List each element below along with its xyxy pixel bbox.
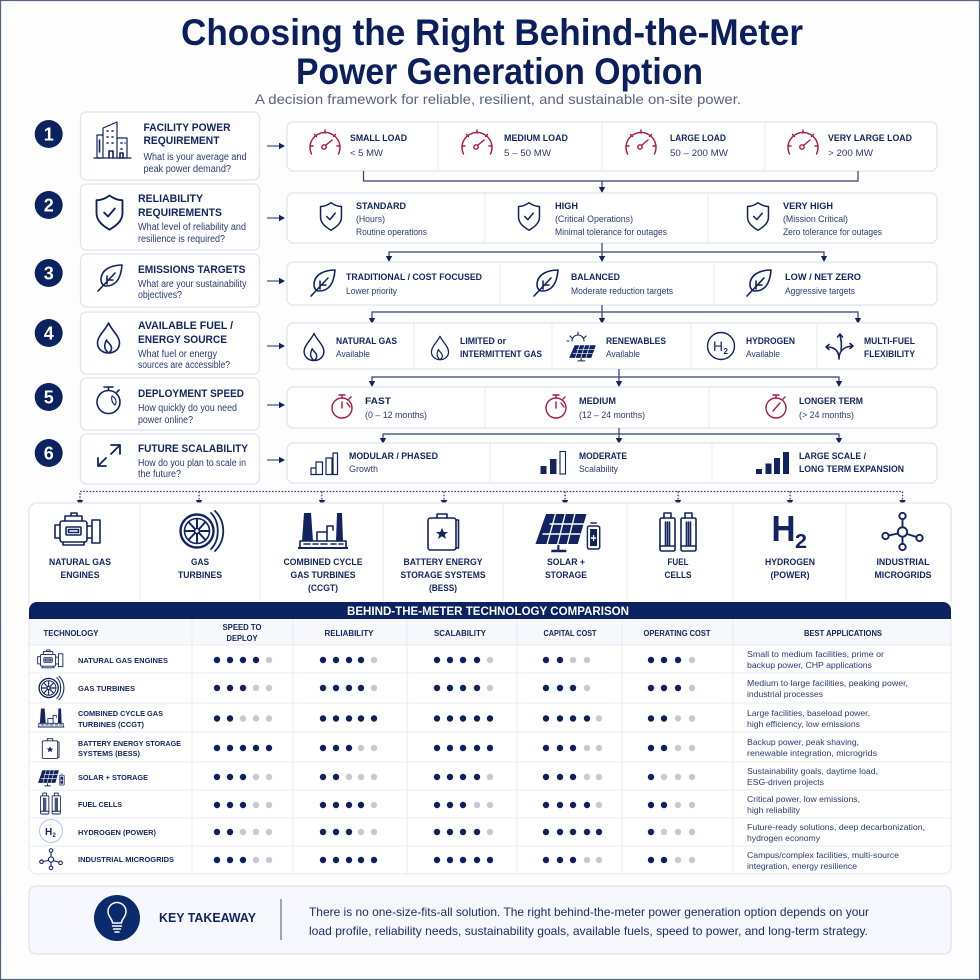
speed options panel: FAST	[365, 396, 391, 407]
row: battery storage: Backup power, peak shaving,	[747, 737, 859, 747]
scalability options panel: MODULAR / PHASED	[349, 451, 438, 462]
icon: hydrogen circle: H	[713, 338, 723, 354]
technology: combined cycle: (CCGT)	[308, 583, 338, 594]
load options panel: > 200 MW	[828, 148, 874, 158]
icon: hydrogen circle: 2	[724, 347, 728, 356]
fuel options panel	[287, 323, 937, 369]
technology: hydrogen: (POWER)	[770, 570, 810, 581]
arrow	[267, 457, 285, 463]
row: gas turbines: Medium to large facilities, peaking power,	[747, 678, 908, 688]
row: natural gas engines: NATURAL GAS ENGINES	[78, 656, 168, 665]
question card 2: RELIABILITY	[138, 193, 203, 205]
arrow	[267, 402, 285, 408]
takeaway text: load profile, reliability needs, sustainability goals, available fuels, speed to power, and long-term strategy.	[309, 924, 868, 938]
technology: battery storage	[400, 514, 486, 594]
step number 4: 4	[44, 324, 54, 344]
technology: battery storage: STORAGE SYSTEMS	[400, 570, 486, 581]
row: fuel cells: high reliability	[747, 805, 801, 815]
row: hydrogen: HYDROGEN (POWER)	[78, 828, 156, 837]
subtitle: A decision framework for reliable, resilient, and sustainable on-site power.	[255, 91, 741, 107]
icon: leaf balanced	[534, 270, 558, 296]
icon: gauge medium	[462, 130, 492, 154]
icon: stopwatch with leaf	[97, 387, 120, 414]
technology: combined cycle: GAS TURBINES	[290, 570, 356, 581]
reliability options panel: (Mission Critical)	[783, 214, 848, 224]
technology: microgrids: MICROGRIDS	[874, 570, 932, 581]
step 2: reliability requirements	[35, 184, 937, 250]
row: solar and storage	[38, 766, 878, 787]
scalability options panel: LARGE SCALE /	[799, 451, 866, 462]
scalability options panel: Scalability	[579, 464, 618, 474]
question card 5: DEPLOYMENT SPEED	[138, 388, 244, 400]
table header row: TECHNOLOGY	[44, 629, 99, 638]
row: industrial microgrids	[40, 849, 899, 871]
step 6: future scalability	[35, 434, 937, 484]
title	[181, 12, 803, 92]
icon: gauge very large	[788, 130, 818, 154]
icon: large bars	[756, 452, 789, 474]
question card 1: FACILITY POWER	[144, 122, 230, 134]
icon: stopwatch fast	[332, 395, 352, 418]
icon: leaf net zero	[747, 270, 771, 296]
icon: shield very high	[748, 203, 768, 230]
question card 2: resilience is required?	[138, 234, 226, 245]
fuel options panel: RENEWABLES	[606, 336, 667, 347]
reliability options panel: Routine operations	[356, 227, 427, 237]
row: battery storage: SYSTEMS (BESS)	[78, 749, 140, 758]
technology: hydrogen: H	[772, 508, 796, 549]
question card 2	[80, 184, 260, 250]
reliability options panel: STANDARD	[356, 201, 406, 212]
load options panel: SMALL LOAD	[350, 133, 407, 144]
technology: combined cycle: COMBINED CYCLE	[284, 557, 363, 568]
panel: technologies	[29, 503, 951, 602]
panel: key takeaway	[29, 886, 951, 954]
scalability options panel	[287, 443, 937, 483]
icon: shield standard	[321, 203, 341, 230]
question card 4	[80, 312, 260, 374]
speed options panel: (12 – 24 months)	[579, 410, 645, 420]
row: fuel cells	[41, 793, 860, 815]
table header row: CAPITAL COST	[544, 629, 597, 638]
connector 1 to 2	[364, 171, 858, 193]
question card 1: peak power demand?	[144, 164, 232, 175]
technology: battery storage: (BESS)	[429, 583, 457, 594]
connector 3 to 4	[369, 305, 861, 324]
step number 2	[35, 191, 63, 219]
fuel options panel: HYDROGEN	[746, 336, 795, 347]
reliability options panel: Zero tolerance for outages	[783, 227, 882, 237]
technology: natural gas engines: NATURAL GAS	[49, 557, 112, 568]
table header row: OPERATING COST	[644, 629, 711, 638]
emissions options panel: Aggressive targets	[785, 286, 855, 296]
speed options panel	[287, 387, 937, 428]
question card 5	[80, 378, 260, 430]
question card 4: ENERGY SOURCE	[138, 334, 227, 346]
technology: battery storage: BATTERY ENERGY	[404, 557, 483, 568]
row: gas turbines: industrial processes	[747, 689, 823, 699]
speed options panel: (> 24 months)	[799, 410, 854, 420]
reliability options panel: (Hours)	[356, 214, 385, 224]
arrow	[267, 343, 285, 349]
row: combined cycle: COMBINED CYCLE GAS	[78, 709, 163, 718]
row: gas turbines: GAS TURBINES	[78, 684, 135, 693]
title: Power Generation Option	[296, 51, 703, 92]
question card 3: What are your sustainability	[138, 279, 247, 290]
question card 4: AVAILABLE FUEL /	[138, 320, 233, 332]
step number 6: 6	[44, 444, 54, 464]
fuel options panel: Available	[336, 349, 370, 359]
icon: hydrogen circle	[708, 332, 734, 360]
icon: stopwatch medium	[546, 395, 566, 418]
load options panel: 5 – 50 MW	[504, 148, 552, 158]
question card 1: REQUIREMENT	[144, 135, 220, 147]
table header row	[30, 619, 950, 645]
load options panel	[287, 122, 937, 171]
technology: solar and storage: STORAGE	[545, 570, 588, 581]
arrow	[267, 215, 285, 221]
scalability options panel: MODERATE	[579, 451, 628, 462]
question card 2: What level of reliability and	[138, 222, 246, 233]
question card 6: the future?	[138, 469, 182, 480]
row: battery storage: renewable integration, microgrids	[747, 748, 877, 758]
technology: fuel cells	[660, 513, 696, 581]
connector 5 to 6	[380, 428, 842, 444]
row: combined cycle: TURBINES (CCGT)	[78, 720, 144, 729]
takeaway text	[309, 905, 869, 938]
emissions options panel: Moderate reduction targets	[571, 286, 673, 296]
reliability options panel: VERY HIGH	[783, 201, 833, 212]
icon: scale arrows	[98, 445, 120, 466]
title: Choosing the Right Behind-the-Meter	[181, 12, 803, 53]
row: combined cycle: Large facilities, baseload power,	[747, 708, 870, 718]
question card 1	[80, 112, 260, 180]
load options panel: VERY LARGE LOAD	[828, 133, 912, 144]
emissions options panel: TRADITIONAL / COST FOCUSED	[346, 272, 482, 283]
row: battery storage	[42, 737, 877, 758]
step 4: available fuel	[35, 312, 937, 374]
icon: leaf	[98, 265, 122, 291]
table heading bar	[29, 602, 951, 619]
scalability options panel: Growth	[349, 464, 378, 474]
technology: solar and storage: SOLAR +	[547, 557, 585, 568]
row: natural gas engines	[38, 649, 884, 670]
technology: microgrids	[874, 513, 932, 581]
step number 2: 2	[44, 196, 54, 216]
row: battery storage: BATTERY ENERGY STORAGE	[78, 739, 181, 748]
technology: natural gas engines: ENGINES	[60, 570, 100, 581]
step number 3: 3	[44, 264, 54, 284]
icon: moderate bars	[540, 452, 566, 474]
question card 3: objectives?	[138, 290, 182, 301]
icon: flame	[98, 323, 120, 353]
technology: gas turbines: GAS	[191, 557, 210, 568]
icon: leaf traditional	[311, 270, 335, 296]
technology: solar and storage	[535, 513, 600, 581]
step number 5	[35, 383, 63, 411]
step number 3	[35, 259, 63, 287]
question card 4: sources are accessible?	[138, 360, 230, 371]
scalability options panel: LONG TERM EXPANSION	[799, 464, 904, 475]
emissions options panel: Lower priority	[346, 286, 397, 296]
fuel options panel: INTERMITTENT GAS	[460, 349, 543, 360]
row: industrial microgrids: Campus/complex facilities, multi-source	[747, 850, 899, 860]
icon: flame limited gas	[431, 336, 449, 360]
fuel options panel: NATURAL GAS	[336, 336, 398, 347]
row: fuel cells: FUEL CELLS	[78, 800, 122, 809]
question card 6	[80, 434, 260, 484]
step 1: facility power requirement	[35, 112, 937, 180]
fuel options panel: MULTI-FUEL	[864, 336, 915, 347]
technology: hydrogen	[765, 508, 815, 581]
row: industrial microgrids: INDUSTRIAL MICROGRIDS	[78, 855, 174, 864]
icon: flame natural gas	[304, 334, 324, 360]
row: hydrogen: hydrogen economy	[747, 833, 821, 843]
icon: outlined bars	[311, 453, 338, 474]
question card 6: How do you plan to scale in	[138, 458, 246, 469]
speed options panel: LONGER TERM	[799, 396, 863, 407]
arrow	[267, 278, 285, 284]
row: gas turbines	[39, 676, 908, 700]
step 5: deployment speed	[35, 378, 937, 430]
icon: stopwatch longer	[766, 395, 786, 418]
table header row: SCALABILITY	[434, 629, 487, 638]
speed options panel: MEDIUM	[579, 396, 616, 407]
icon: solar with sun	[567, 332, 596, 361]
question card 5: How quickly do you need	[138, 403, 237, 414]
icon: buildings	[94, 122, 131, 158]
question card 3: EMISSIONS TARGETS	[138, 264, 246, 276]
step number 1: 1	[44, 124, 54, 144]
icon: shield high	[519, 203, 539, 230]
table header row: BEST APPLICATIONS	[804, 629, 882, 638]
row: combined cycle: high efficiency, low emissions	[747, 719, 860, 729]
row: combined cycle	[38, 708, 870, 729]
technology: fuel cells: CELLS	[664, 570, 692, 581]
load options panel: 50 – 200 MW	[670, 148, 729, 158]
emissions options panel	[287, 262, 937, 305]
row: natural gas engines: Small to medium facilities, prime or	[747, 649, 884, 659]
row: fuel cells: Critical power, low emissions,	[747, 794, 860, 804]
row: solar and storage: Sustainability goals, daytime load,	[747, 766, 878, 776]
row: hydrogen	[40, 820, 925, 843]
technology: fuel cells: FUEL	[668, 557, 689, 568]
icon: multi-fuel arrows	[826, 334, 853, 359]
arrow	[267, 143, 285, 149]
connector 4 to 5	[369, 369, 842, 387]
row: natural gas engines: backup power, CHP applications	[747, 660, 872, 670]
question card 3	[80, 254, 260, 307]
question card 5: power online?	[138, 415, 193, 426]
emissions options panel: BALANCED	[571, 272, 620, 283]
technology: hydrogen: HYDROGEN	[765, 557, 815, 568]
connector 2 to 3	[386, 243, 827, 262]
load options panel: MEDIUM LOAD	[504, 133, 568, 144]
row: industrial microgrids: integration, energy resilience	[747, 861, 857, 871]
question card 6: FUTURE SCALABILITY	[138, 443, 248, 455]
question card 2: REQUIREMENTS	[138, 207, 222, 219]
reliability options panel: (Critical Operations)	[555, 214, 633, 224]
fuel options panel: LIMITED or	[460, 336, 506, 347]
table header row: DEPLOY	[226, 634, 258, 643]
load options panel: < 5 MW	[350, 148, 384, 158]
load options panel: LARGE LOAD	[670, 133, 726, 144]
fuel options panel: Available	[606, 349, 640, 359]
technology: gas turbines: TURBINES	[178, 570, 223, 581]
dotted connector to technologies	[77, 492, 906, 506]
takeaway label: KEY TAKEAWAY	[159, 911, 257, 925]
takeaway text: There is no one-size-fits-all solution. The right behind-the-meter power generation option depends on your	[309, 905, 869, 919]
reliability options panel: HIGH	[555, 201, 578, 212]
technology: microgrids: INDUSTRIAL	[876, 557, 930, 568]
row: solar and storage: ESG-driven projects	[747, 777, 824, 787]
speed options panel: (0 – 12 months)	[365, 410, 427, 420]
step number 5: 5	[44, 388, 54, 408]
question card 4: What fuel or energy	[138, 349, 217, 360]
row: hydrogen: 2	[52, 833, 56, 839]
table frame	[29, 619, 951, 874]
table heading bar: BEHIND-THE-METER TECHNOLOGY COMPARISON	[347, 604, 629, 618]
technology: gas turbines	[178, 511, 223, 581]
emissions options panel: LOW / NET ZERO	[785, 272, 862, 283]
fuel options panel: FLEXIBILITY	[864, 349, 916, 360]
icon: shield	[97, 195, 122, 230]
step number 4	[35, 319, 63, 347]
table header row: SPEED TO	[222, 623, 262, 632]
reliability options panel: Minimal tolerance for outages	[555, 227, 667, 237]
row: solar and storage: SOLAR + STORAGE	[78, 773, 148, 782]
comparison table	[29, 602, 951, 874]
technology: combined cycle	[284, 513, 363, 594]
step number 1	[35, 120, 63, 148]
technology: hydrogen: 2	[795, 531, 807, 553]
table header row: RELIABILITY	[324, 629, 374, 638]
step number 6	[35, 439, 63, 467]
icon: light bulb	[94, 895, 140, 941]
question card 1: What is your average and	[144, 152, 246, 163]
icon: gauge large	[626, 130, 656, 154]
technology: natural gas engines	[49, 513, 112, 581]
reliability options panel	[287, 193, 937, 243]
icon: gauge small	[310, 130, 340, 154]
row: hydrogen: H	[45, 827, 52, 838]
fuel options panel: Available	[746, 349, 780, 359]
step 3: emissions targets	[35, 254, 937, 307]
row: hydrogen: Future-ready solutions, deep decarbonization,	[747, 822, 925, 832]
